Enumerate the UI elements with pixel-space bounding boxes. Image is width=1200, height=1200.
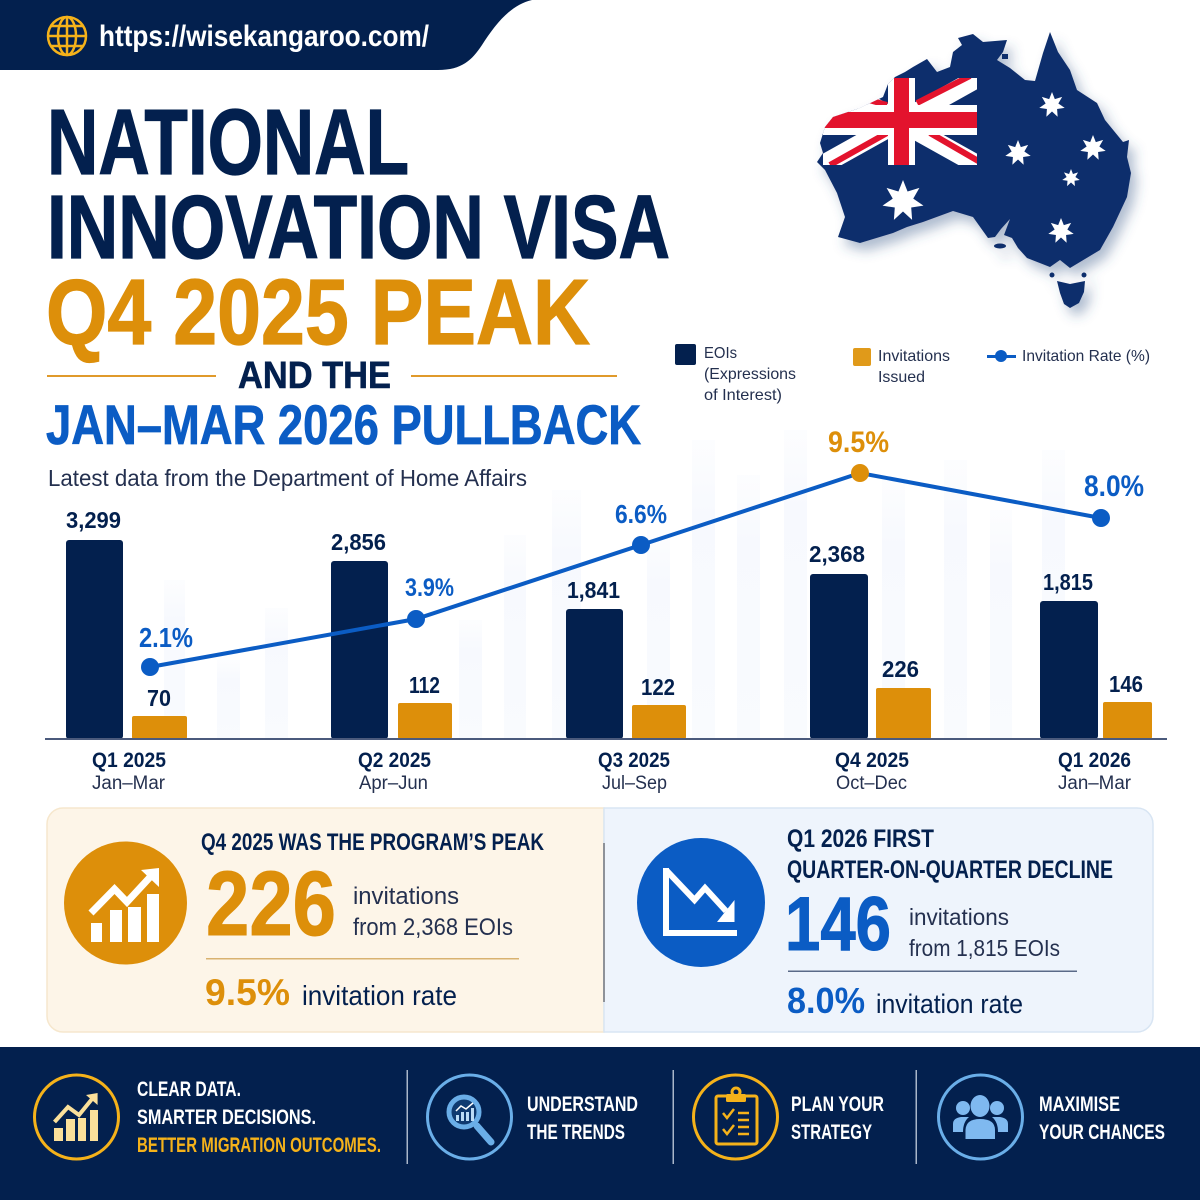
footer text: chances <box>1039 1092 1165 1144</box>
rate value labels: 6.6% <box>615 499 667 529</box>
legend: EOIs: EOIs <box>704 345 737 362</box>
invitation value labels <box>147 656 1143 711</box>
decline detail: from 1,815 EOIs <box>909 935 1060 961</box>
footer text: trends: THE TRENDS <box>527 1120 625 1144</box>
quarter axis labels: Jan–Mar <box>1058 773 1132 794</box>
rule left <box>47 375 216 377</box>
title line: Innovation Visa: INNOVATION VISA <box>47 178 670 278</box>
invitation bars <box>132 688 1152 739</box>
EOI value labels: 2,368 <box>809 541 865 567</box>
EOI value labels: 1,815 <box>1043 569 1093 595</box>
footer text: clear data <box>137 1077 381 1157</box>
invitation value labels: 146 <box>1109 671 1143 697</box>
peak invitation rate <box>205 972 457 1013</box>
rule right <box>411 375 617 377</box>
title line: National: NATIONAL <box>47 90 409 194</box>
icon: magnifier <box>428 1075 512 1159</box>
icon: data chart <box>34 1075 118 1159</box>
quarter axis labels: Q2 2025 <box>358 749 431 772</box>
footer text: chances: MAXIMISE <box>1039 1092 1120 1116</box>
header banner with URL <box>0 0 532 70</box>
icon: rising chart <box>64 842 187 964</box>
title line: Jan-Mar 2026 Pullback: JAN–MAR 2026 PULLBACK <box>46 393 641 456</box>
title line: Q4 2025 Peak: Q4 2025 PEAK <box>46 260 590 364</box>
legend: invitations: Invitations <box>878 348 950 365</box>
decline number: 146 <box>785 882 891 967</box>
rate value labels <box>139 426 1144 653</box>
decline heading: QUARTER-ON-QUARTER DECLINE <box>787 856 1113 884</box>
legend: invitation rate: Invitation Rate (%) <box>1022 348 1150 365</box>
quarter axis labels: Oct–Dec <box>836 773 907 794</box>
footer text: strategy <box>791 1092 884 1144</box>
footer band <box>0 1047 1200 1200</box>
rate value labels: 8.0% <box>1084 470 1144 503</box>
panel: Q1 2026 decline <box>603 808 1153 1032</box>
quarter axis labels: Q4 2025 <box>835 749 909 772</box>
combo chart <box>45 426 1167 794</box>
peak invitation rate: invitation rate <box>302 980 457 1011</box>
icon: globe <box>48 17 86 55</box>
subtitle: Latest data from the Department of Home Affairs <box>48 465 527 491</box>
footer text: clear data: BETTER MIGRATION OUTCOMES. <box>137 1133 381 1157</box>
invitation rate line <box>141 464 1110 676</box>
chart legend <box>675 344 1150 404</box>
decline heading <box>787 825 1113 884</box>
decline invitation rate: invitation rate <box>876 989 1023 1019</box>
peak heading: Q4 2025 WAS THE PROGRAM’S PEAK <box>201 829 544 856</box>
peak detail: invitations <box>353 883 459 910</box>
quarter axis labels: Apr–Jun <box>359 773 428 794</box>
footer text: strategy: PLAN YOUR <box>791 1092 884 1116</box>
footer text: clear data: SMARTER DECISIONS. <box>137 1105 316 1129</box>
Australia map with flag <box>815 32 1131 308</box>
quarter axis labels <box>92 749 1132 794</box>
decline invitation rate <box>787 980 1023 1021</box>
rate value labels: 9.5% <box>828 426 889 459</box>
legend: EOIs: of Interest) <box>704 387 782 404</box>
rate value labels: 3.9% <box>405 574 454 602</box>
legend: invitations <box>853 348 950 386</box>
invitation value labels: 70 <box>147 685 171 711</box>
EOI bars <box>66 540 1098 739</box>
peak invitation rate: 9.5% <box>205 972 290 1013</box>
invitation value labels: 122 <box>641 674 675 700</box>
footer text: trends: UNDERSTAND <box>527 1092 638 1116</box>
decline detail: invitations <box>909 904 1009 930</box>
quarter axis labels: Q1 2025 <box>92 749 166 772</box>
axis line <box>45 738 1167 740</box>
rate value labels: 2.1% <box>139 622 193 653</box>
invitation value labels: 226 <box>882 656 919 682</box>
quarter axis labels: Q1 2026 <box>1058 749 1131 772</box>
quarter axis labels: Q3 2025 <box>598 749 670 772</box>
legend: EOIs <box>675 344 796 404</box>
quarter axis labels: Jul–Sep <box>602 773 667 794</box>
footer text: strategy: STRATEGY <box>791 1120 872 1144</box>
panel: Q4 2025 peak <box>47 808 604 1032</box>
EOI value labels: 2,856 <box>331 529 386 555</box>
icon: falling chart <box>637 838 765 967</box>
peak number: 226 <box>206 853 336 955</box>
legend: invitations: Issued <box>878 369 925 386</box>
decline detail <box>909 904 1060 961</box>
peak detail <box>353 883 513 941</box>
website URL: https://wisekangaroo.com/ <box>99 20 430 53</box>
icon: clipboard <box>694 1075 778 1159</box>
EOI value labels: 3,299 <box>66 507 121 533</box>
legend: EOIs: (Expressions <box>704 366 796 383</box>
EOI value labels: 1,841 <box>567 577 620 603</box>
EOI value labels <box>66 507 1093 603</box>
title block <box>46 90 670 491</box>
decline invitation rate: 8.0% <box>787 980 865 1021</box>
icon: people <box>938 1075 1022 1159</box>
peak detail: from 2,368 EOIs <box>353 914 513 941</box>
invitation value labels: 112 <box>409 672 440 698</box>
decline heading: Q1 2026 FIRST <box>787 825 934 853</box>
footer text: clear data: CLEAR DATA. <box>137 1077 241 1101</box>
title line: And the: AND THE <box>238 355 391 397</box>
footer text: trends <box>527 1092 638 1144</box>
quarter axis labels: Jan–Mar <box>92 773 166 794</box>
